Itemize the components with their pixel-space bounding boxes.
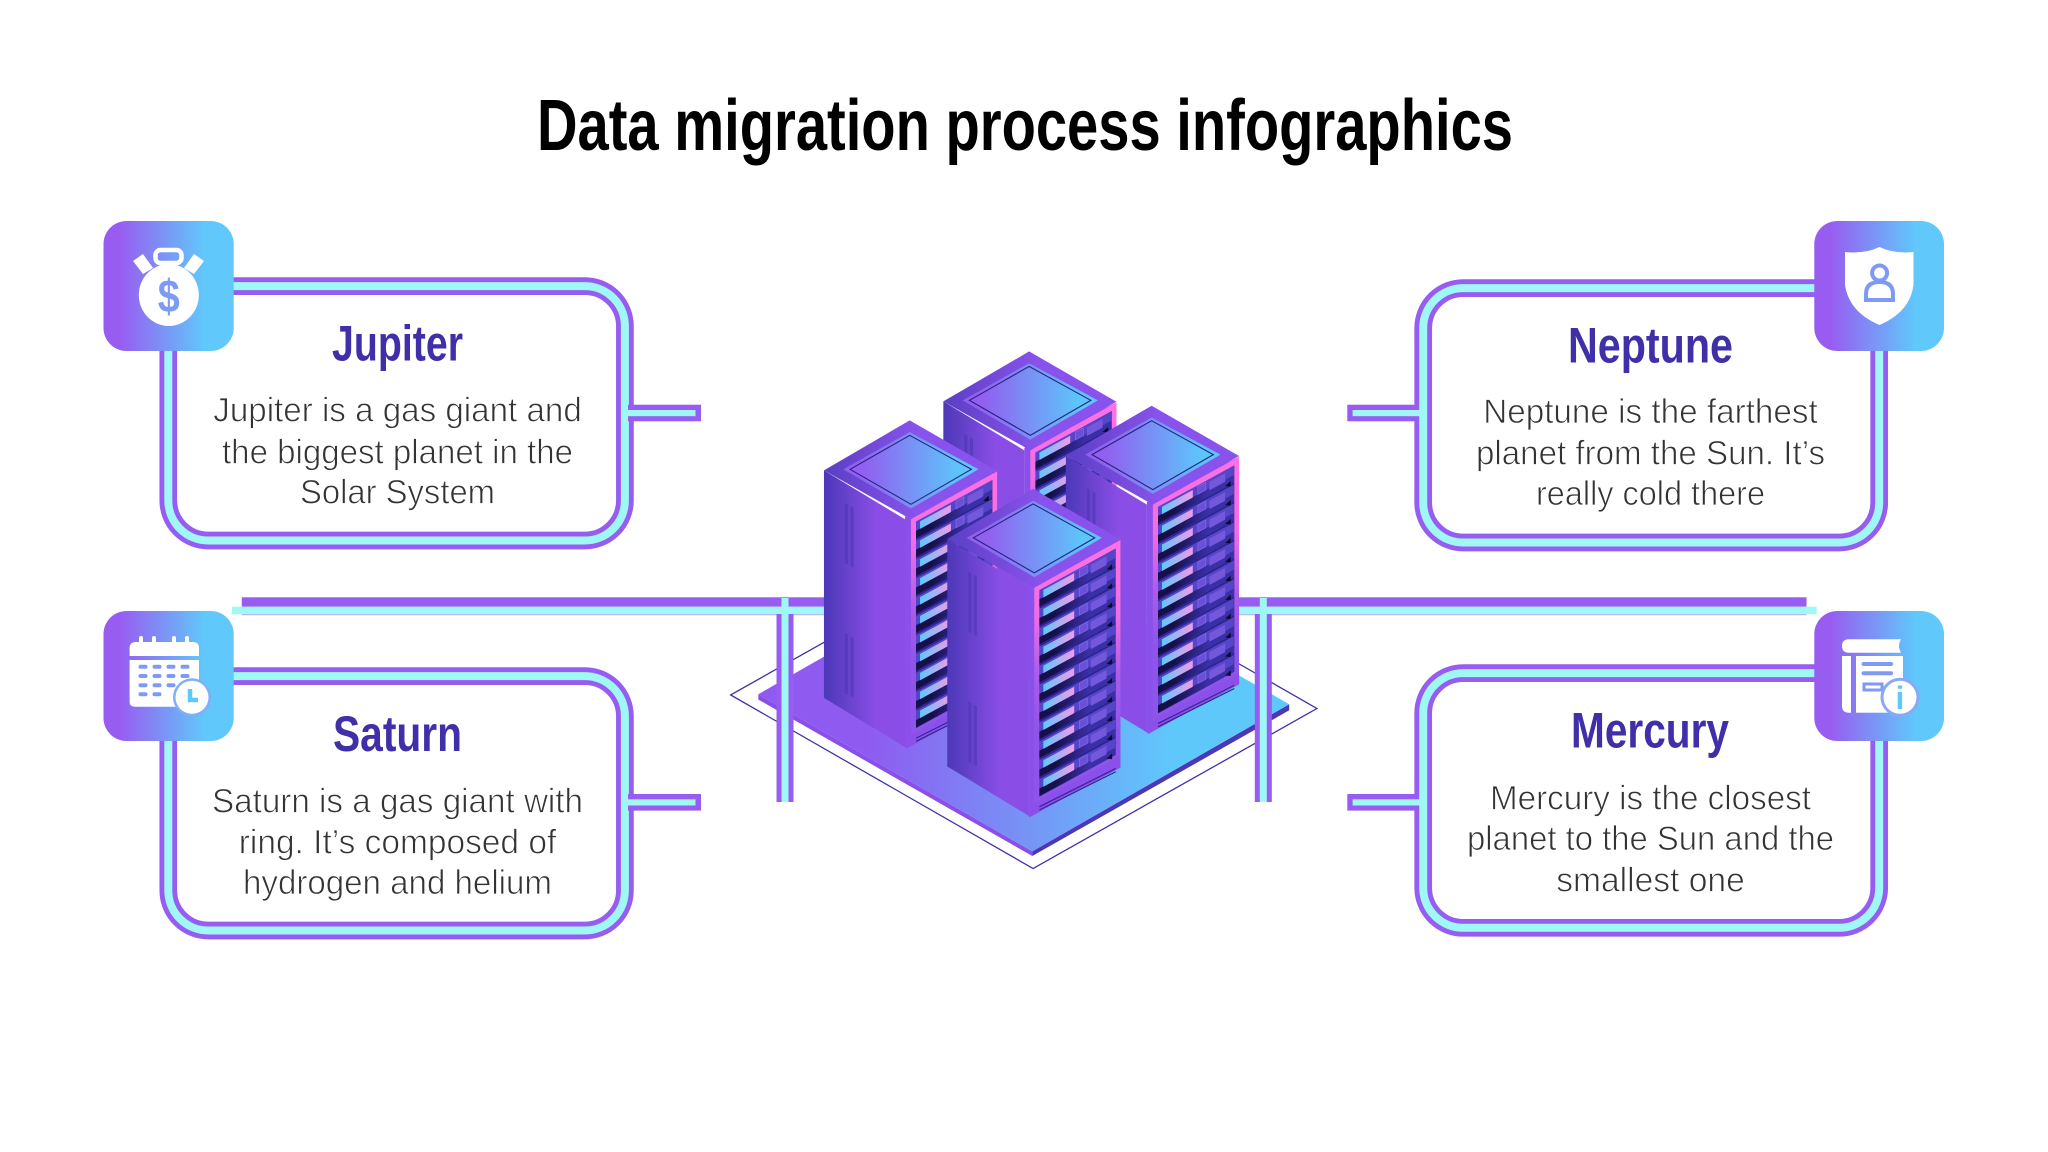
central server illustration with platform: [232, 351, 1817, 869]
icon: calendar with clock: [104, 611, 234, 741]
panel: Neptune: [1347, 221, 1944, 542]
text: Neptune description: Neptune is the farthest: [1483, 393, 1818, 431]
text: Jupiter description: Jupiter is a gas giant and: [213, 392, 582, 430]
icon: shield with person: [1814, 221, 1944, 351]
text: Saturn description: hydrogen and helium: [243, 864, 552, 902]
text: Jupiter description: Solar System: [300, 473, 495, 511]
icon: book with info: i: [1896, 680, 1904, 716]
title: Data migration process infographics: [537, 86, 1513, 166]
icon: stopwatch with dollar: $: [158, 270, 180, 322]
text: Jupiter description: the biggest planet in the: [222, 433, 573, 471]
text: Neptune description: planet from the Sun. It’s: [1476, 434, 1825, 472]
text: Neptune description: [1476, 393, 1825, 513]
text: Mercury description: Mercury is the closest: [1490, 780, 1811, 818]
text: Mercury description: smallest one: [1556, 862, 1745, 900]
text: Saturn description: ring. It’s composed of: [239, 823, 557, 861]
text: Mercury description: planet to the Sun and the: [1467, 820, 1834, 858]
icon: stopwatch with dollar: [104, 221, 234, 351]
text: Saturn description: [212, 782, 583, 902]
heading: Neptune: Neptune: [1568, 317, 1733, 373]
text: Jupiter description: [213, 392, 582, 511]
heading: Mercury: Mercury: [1571, 703, 1729, 759]
text: Mercury description: [1467, 780, 1834, 900]
connector lines: left horizontal: [232, 597, 842, 802]
panel: Jupiter: [104, 221, 701, 540]
heading: Jupiter: Jupiter: [332, 316, 463, 372]
text: Saturn description: Saturn is a gas giant with: [212, 782, 583, 820]
heading: Saturn: Saturn: [333, 706, 462, 762]
text: Neptune description: really cold there: [1536, 475, 1765, 513]
panel: Mercury: [1347, 611, 1944, 928]
panel: Saturn: [104, 611, 701, 930]
connector lines: right horizontal: [1220, 597, 1817, 802]
icon: book with info: [1814, 611, 1944, 741]
server towers: [824, 351, 1239, 817]
